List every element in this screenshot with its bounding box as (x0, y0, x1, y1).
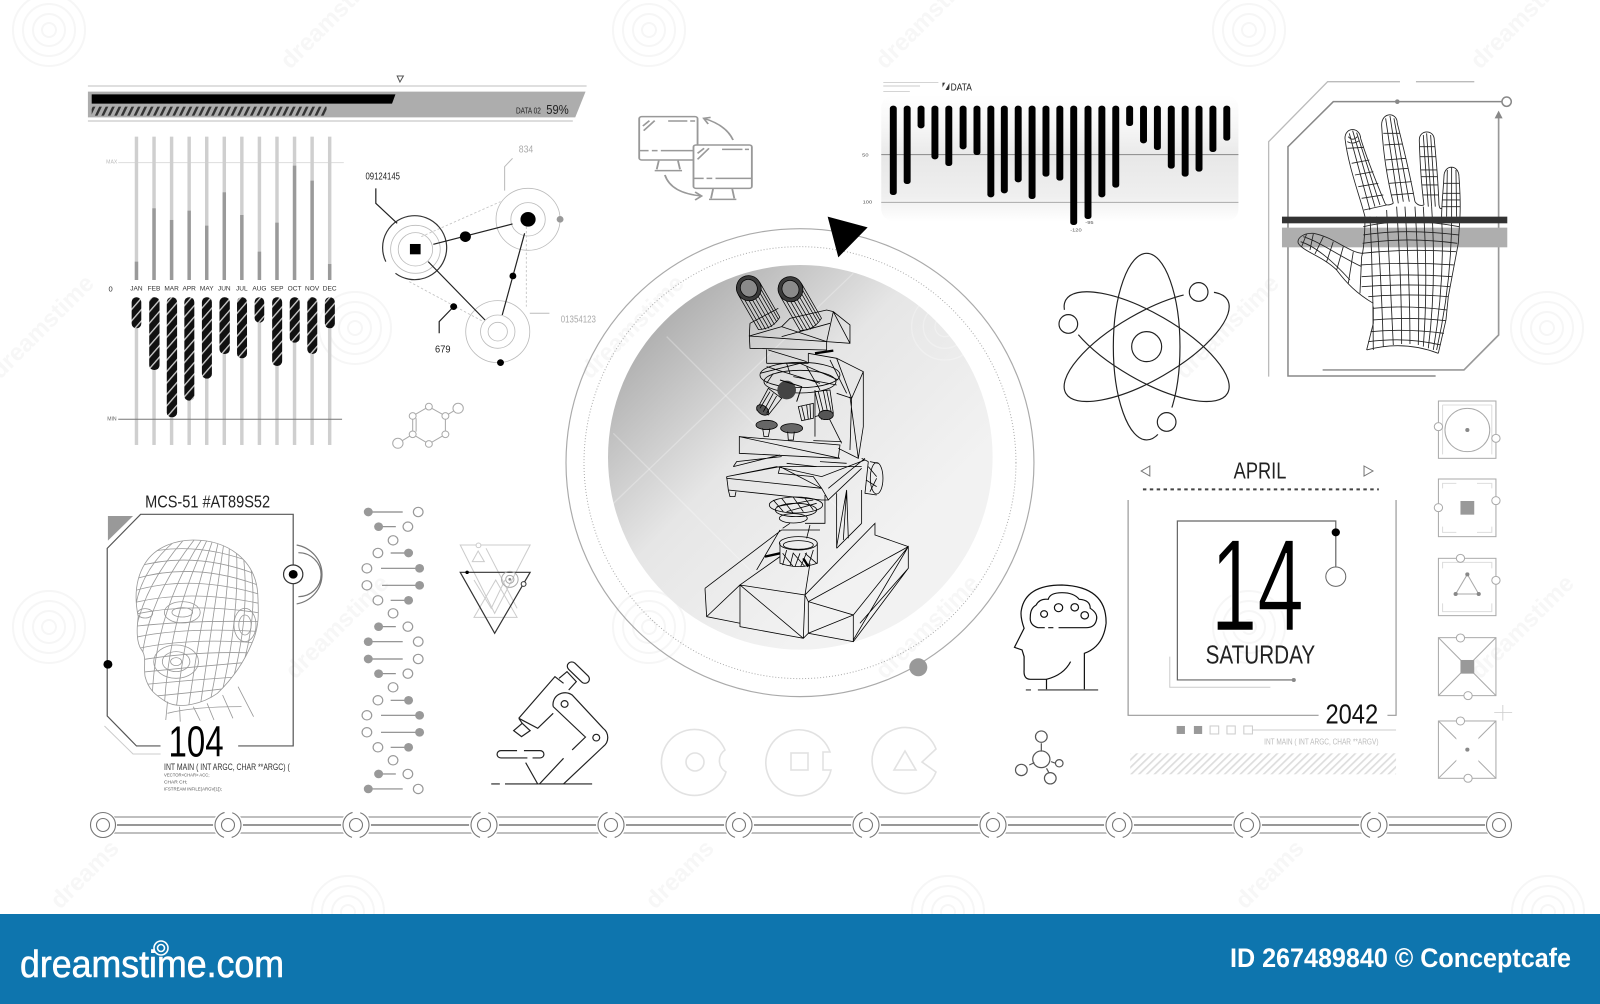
logo text: dreamstime.com (20, 944, 284, 986)
icons: faint shape dials (661, 728, 936, 796)
icon: small molecule (393, 403, 463, 448)
panel: calendar: APRIL (1234, 459, 1286, 484)
chain timeline (89, 810, 1513, 840)
arrow marker (828, 217, 868, 257)
panel: node network diagram: 834 (519, 144, 534, 155)
watermark pattern: dreamstime (575, 270, 690, 384)
panel: progress bar: DATA 02 (516, 107, 541, 116)
progress ball (909, 658, 927, 676)
icon: line art microscope (491, 660, 608, 784)
panel: monthly bar chart: FEB (148, 286, 160, 293)
watermark highlights on disc (610, 273, 978, 573)
panel: monthly bar chart: OCT (288, 286, 302, 293)
panel: calendar: INT MAIN ( INT ARGC, CHAR **ARGV) (1264, 737, 1379, 746)
right eyepiece (773, 272, 824, 334)
panel: data bar chart: DATA (951, 82, 972, 93)
wireframe microscope (705, 271, 908, 642)
icon: square tile (1434, 479, 1500, 537)
panel: calendar (1128, 459, 1396, 774)
icon: head with brain (1014, 585, 1106, 690)
panel: monthly bar chart: MAX (106, 160, 118, 166)
icon: atom (1049, 253, 1244, 440)
watermark pattern: dreamstime (1465, 570, 1580, 684)
icon: two monitors sync (639, 117, 752, 200)
watermark pattern: dreams (640, 835, 720, 914)
icon: circle tile (1434, 401, 1500, 458)
panel: monthly bar chart: NOV (305, 286, 320, 293)
panel: calendar: 2042 (1325, 699, 1378, 730)
panel: wireframe head scan: 104 (169, 718, 224, 766)
wireframe mesh (131, 537, 262, 722)
panel: central microscope disc (566, 217, 1034, 697)
chart: DNA strand (362, 507, 424, 794)
panel: monthly bar chart: DEC (323, 286, 337, 293)
panel: monthly bar chart: SEP (270, 286, 284, 293)
panel: node network diagram: 01354123 (561, 314, 596, 325)
left eyepiece (732, 271, 782, 333)
panel: node network diagram: 09124145 (365, 171, 400, 182)
panel: calendar: SATURDAY (1206, 640, 1315, 669)
panel: data bar chart: 100 (863, 200, 872, 205)
panel: monthly bar chart: APR (182, 286, 196, 293)
panel: wireframe head scan: CHAR CH; (164, 780, 187, 786)
panel: hand scanner (1269, 82, 1511, 377)
panel: monthly bar chart: 0 (109, 284, 113, 293)
panel: monthly bar chart: MAY (200, 286, 214, 293)
panel: monthly bar chart: JAN (130, 286, 143, 293)
panel: calendar: 14 (1211, 513, 1304, 659)
panel: wireframe head scan: IFSTREAM INFILE(ARGV[1]); (164, 787, 222, 793)
hand wireframe (1298, 115, 1460, 353)
panel: progress bar: 59% (546, 102, 569, 117)
panel: wireframe head scan (103, 492, 322, 793)
panel: data bar chart: -95 (1085, 220, 1094, 226)
panel: progress bar (88, 76, 587, 121)
panel: monthly bar chart: AUG (252, 286, 266, 293)
watermark pattern: dreamstime (870, 570, 985, 684)
panel: wireframe head scan: VECTOR<CHAR> ACC; (164, 773, 210, 779)
watermark pattern: dreamstime (1170, 270, 1285, 384)
logo spiral (154, 941, 168, 955)
watermark pattern: dreams (45, 835, 125, 914)
icon: molecule cluster (1015, 731, 1063, 784)
watermark pattern: dreams (1230, 835, 1310, 914)
panel: monthly bar chart: MIN (107, 416, 117, 422)
panel: data bar chart: 50 (862, 153, 869, 158)
panel: monthly bar chart: JUN (218, 286, 231, 293)
image id and credit: ID 267489840 © Conceptcafe (1230, 943, 1571, 973)
icon: triangle tile (1438, 554, 1500, 616)
panel: monthly bar chart: JUL (236, 286, 248, 293)
watermark pattern: dreamstime (280, 570, 395, 684)
panel: wireframe head scan: INT MAIN ( INT ARGC, CHAR **ARGC) ( (164, 762, 290, 772)
panel: right column icons (1434, 401, 1512, 782)
panel: monthly bar chart: MAR (164, 286, 179, 293)
icon: nested triangles (460, 543, 530, 633)
icon: envelope square tile (1438, 634, 1496, 700)
panel: node network diagram (365, 144, 596, 366)
icon: envelope dot tile (1438, 717, 1496, 782)
panel: monthly bar chart (106, 137, 344, 445)
panel: data bar chart (862, 82, 1238, 233)
footer banner (0, 914, 1600, 1004)
panel: wireframe head scan: MCS-51 #AT89S52 (145, 492, 270, 512)
panel: node network diagram: 679 (435, 345, 451, 356)
panel: data bar chart: -120 (1070, 228, 1082, 233)
